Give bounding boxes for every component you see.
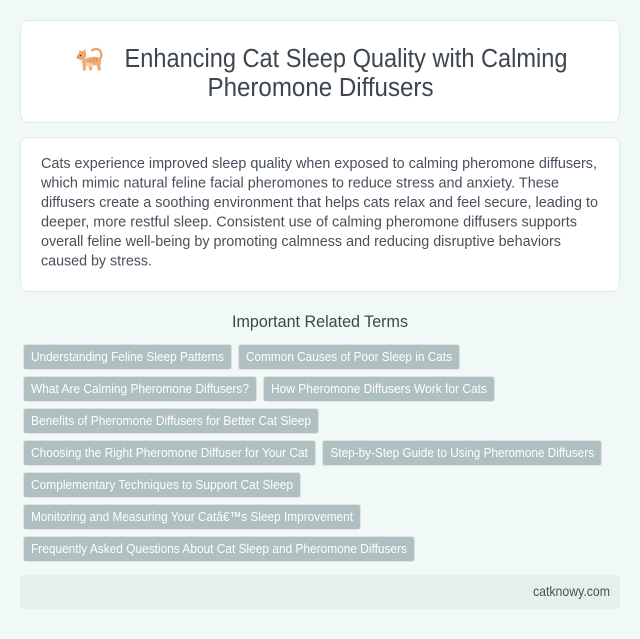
tag: Benefits of Pheromone Diffusers for Better Cat Sleep (31, 413, 311, 428)
tag (24, 376, 256, 402)
title (124, 45, 568, 102)
text block: summary paragraph (40, 155, 598, 270)
title: Pheromone Diffusers (208, 74, 434, 102)
text block: summary paragraph: Cats experience improved sleep quality when exposed to calming pheromone diffusers, (41, 155, 597, 172)
footer (20, 575, 620, 609)
tag (24, 504, 360, 530)
text block: summary paragraph: overall feline well-being by promoting calmness and reducing disruptive behaviors (41, 233, 561, 250)
tag: Frequently Asked Questions About Cat Sleep and Pheromone Diffusers (31, 541, 407, 556)
panel: summary text (20, 138, 620, 292)
panel: header (20, 20, 620, 122)
tag (238, 344, 460, 370)
tag: What Are Calming Pheromone Diffusers? (31, 381, 249, 396)
heading: related terms: Important Related Terms (232, 312, 408, 331)
tag: Common Causes of Poor Sleep in Cats (246, 349, 452, 364)
tag (24, 472, 300, 498)
tag: How Pheromone Diffusers Work for Cats (271, 381, 487, 396)
tag: Understanding Feline Sleep Patterns (31, 349, 224, 364)
tag: Complementary Techniques to Support Cat Sleep (31, 477, 293, 492)
tag (24, 408, 318, 434)
tag (264, 376, 494, 402)
icon: cat (77, 48, 101, 70)
text block: summary paragraph: caused by stress. (41, 252, 152, 270)
title: Enhancing Cat Sleep Quality with Calming (124, 45, 568, 73)
tag: Step-by-Step Guide to Using Pheromone Diffusers (330, 445, 594, 460)
tag: Monitoring and Measuring Your Catâ€™s Sleep Improvement (31, 509, 353, 524)
tag: Choosing the Right Pheromone Diffuser for Your Cat (31, 445, 308, 460)
footer: catknowy.com (533, 583, 610, 599)
tag (24, 344, 232, 370)
text block: summary paragraph: deeper, more restful sleep. Consistent use of calming pheromone diffusers supports (41, 214, 577, 230)
tag (322, 440, 602, 466)
tag (24, 440, 316, 466)
panel: related term tags (24, 344, 602, 562)
tag (24, 536, 414, 562)
text block: summary paragraph: diffusers create a soothing environment that helps cats relax and feel secure, leading to (41, 194, 598, 211)
text block: summary paragraph: which mimic natural feline facial pheromones to reduce stress and anxiety. These (40, 174, 559, 192)
